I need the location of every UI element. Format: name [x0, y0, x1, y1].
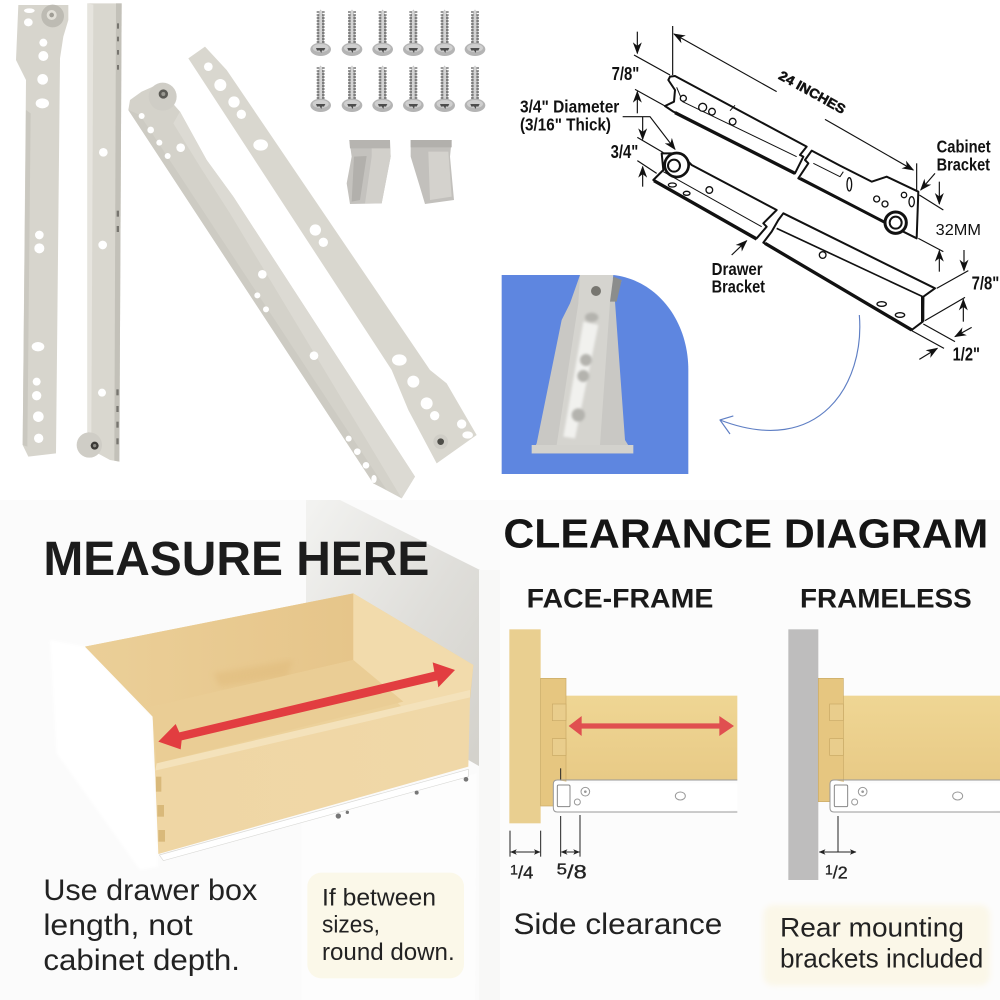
- callout: rear mounting brackets: brackets included: [780, 944, 983, 974]
- panel: dimension line drawing: [502, 26, 999, 474]
- label: 32MM: 32MM: [936, 222, 981, 239]
- rear mounting bracket right: [411, 140, 454, 204]
- dimension: 1/2: 1: [825, 861, 833, 877]
- drawer slide: [159, 769, 468, 861]
- label: diameter: (3/16" Thick): [520, 115, 611, 135]
- panel background: [500, 500, 1000, 1000]
- drawer back wall: [85, 593, 353, 708]
- curved blue arrow: [720, 315, 860, 434]
- red double arrow: [158, 662, 455, 749]
- drawer interior base: [85, 593, 473, 772]
- dimension: 1/4: [510, 831, 541, 882]
- drawer front face: [155, 697, 470, 854]
- panel: measure here: [0, 500, 500, 1000]
- rear mounting bracket left: [347, 140, 391, 204]
- heading: MEASURE HERE: [43, 532, 429, 586]
- label: 24 inches: 24 INCHES: [776, 68, 848, 117]
- cabinet interior wall: [306, 500, 480, 767]
- label: 3/4: 3/4": [611, 141, 638, 162]
- drawer near edge: [155, 690, 470, 772]
- rail: cabinet bracket vertical: [77, 3, 122, 462]
- dimension: 5/8: [557, 815, 587, 884]
- dimension: 1/2: 2: [838, 862, 848, 882]
- rail: drawer bracket vertical: [16, 5, 68, 457]
- mounting screws: [310, 9, 485, 112]
- drawer side wall: [353, 593, 473, 708]
- subheading: face-frame: FACE-FRAME: [527, 583, 713, 613]
- label: cabinet bracket: Cabinet: [937, 137, 991, 157]
- dimension: 1/4: /: [518, 862, 523, 882]
- label: drawer bracket: Bracket: [712, 277, 765, 297]
- body text: Use drawer box: [43, 874, 258, 907]
- drawer bracket left piece: [653, 153, 777, 239]
- drawer front panel: [50, 640, 158, 870]
- dimension: 1/2: [819, 816, 856, 882]
- cabinet bracket left piece: [665, 76, 807, 173]
- dimension lines and arrows: [623, 26, 972, 359]
- diagram: face-frame: [509, 629, 737, 823]
- diagram: frameless: [788, 629, 1000, 880]
- lower cabinet door: [302, 773, 477, 1000]
- callout: round down: sizes,: [322, 912, 380, 939]
- wood grain patch: [213, 660, 293, 687]
- cabinet right stile: [479, 570, 500, 1000]
- drawer floor: [145, 660, 403, 763]
- blue inset: rear bracket close-up: [502, 275, 688, 474]
- drawer bracket right piece: [763, 213, 935, 330]
- label: diameter: 3/4" Diameter: [520, 97, 620, 117]
- rail: cabinet bracket diagonal: [128, 83, 415, 498]
- callout: round down: round down.: [322, 939, 455, 966]
- dimension: 5/8: 8: [574, 863, 587, 884]
- label: 7/8 upper: 7/8": [612, 63, 639, 84]
- dimension: 1/4: 1: [510, 861, 518, 877]
- label: 1/2: 1/2": [953, 344, 980, 365]
- callout: rear mounting brackets: Rear mounting: [780, 913, 964, 943]
- panel: clearance diagram: [500, 500, 1000, 1000]
- body text: cabinet depth.: [43, 944, 240, 977]
- panel background: [0, 500, 500, 1000]
- rail: drawer bracket diagonal: [188, 47, 477, 463]
- heading: CLEARANCE DIAGRAM: [503, 510, 988, 556]
- body text: length, not: [43, 909, 193, 942]
- label: drawer bracket: Drawer: [712, 259, 763, 279]
- dimension: 1/2: /: [833, 862, 838, 882]
- dimension: 5/8: /: [567, 863, 574, 884]
- subheading: frameless: FRAMELESS: [800, 583, 972, 613]
- dovetail joints: [156, 777, 165, 842]
- panel: product parts photo: [16, 3, 485, 498]
- caption: side clearance: Side clearance: [513, 908, 722, 941]
- callout: round down: [307, 873, 464, 978]
- callout: rear mounting brackets: [763, 905, 990, 986]
- callout: round down: If between: [322, 884, 436, 911]
- dimension: 5/8: 5: [557, 862, 567, 879]
- label: cabinet bracket: Bracket: [937, 155, 990, 175]
- dimension: 1/4: 4: [523, 862, 533, 882]
- cabinet bracket right piece: [798, 151, 918, 238]
- wooden drawer box: [85, 593, 473, 854]
